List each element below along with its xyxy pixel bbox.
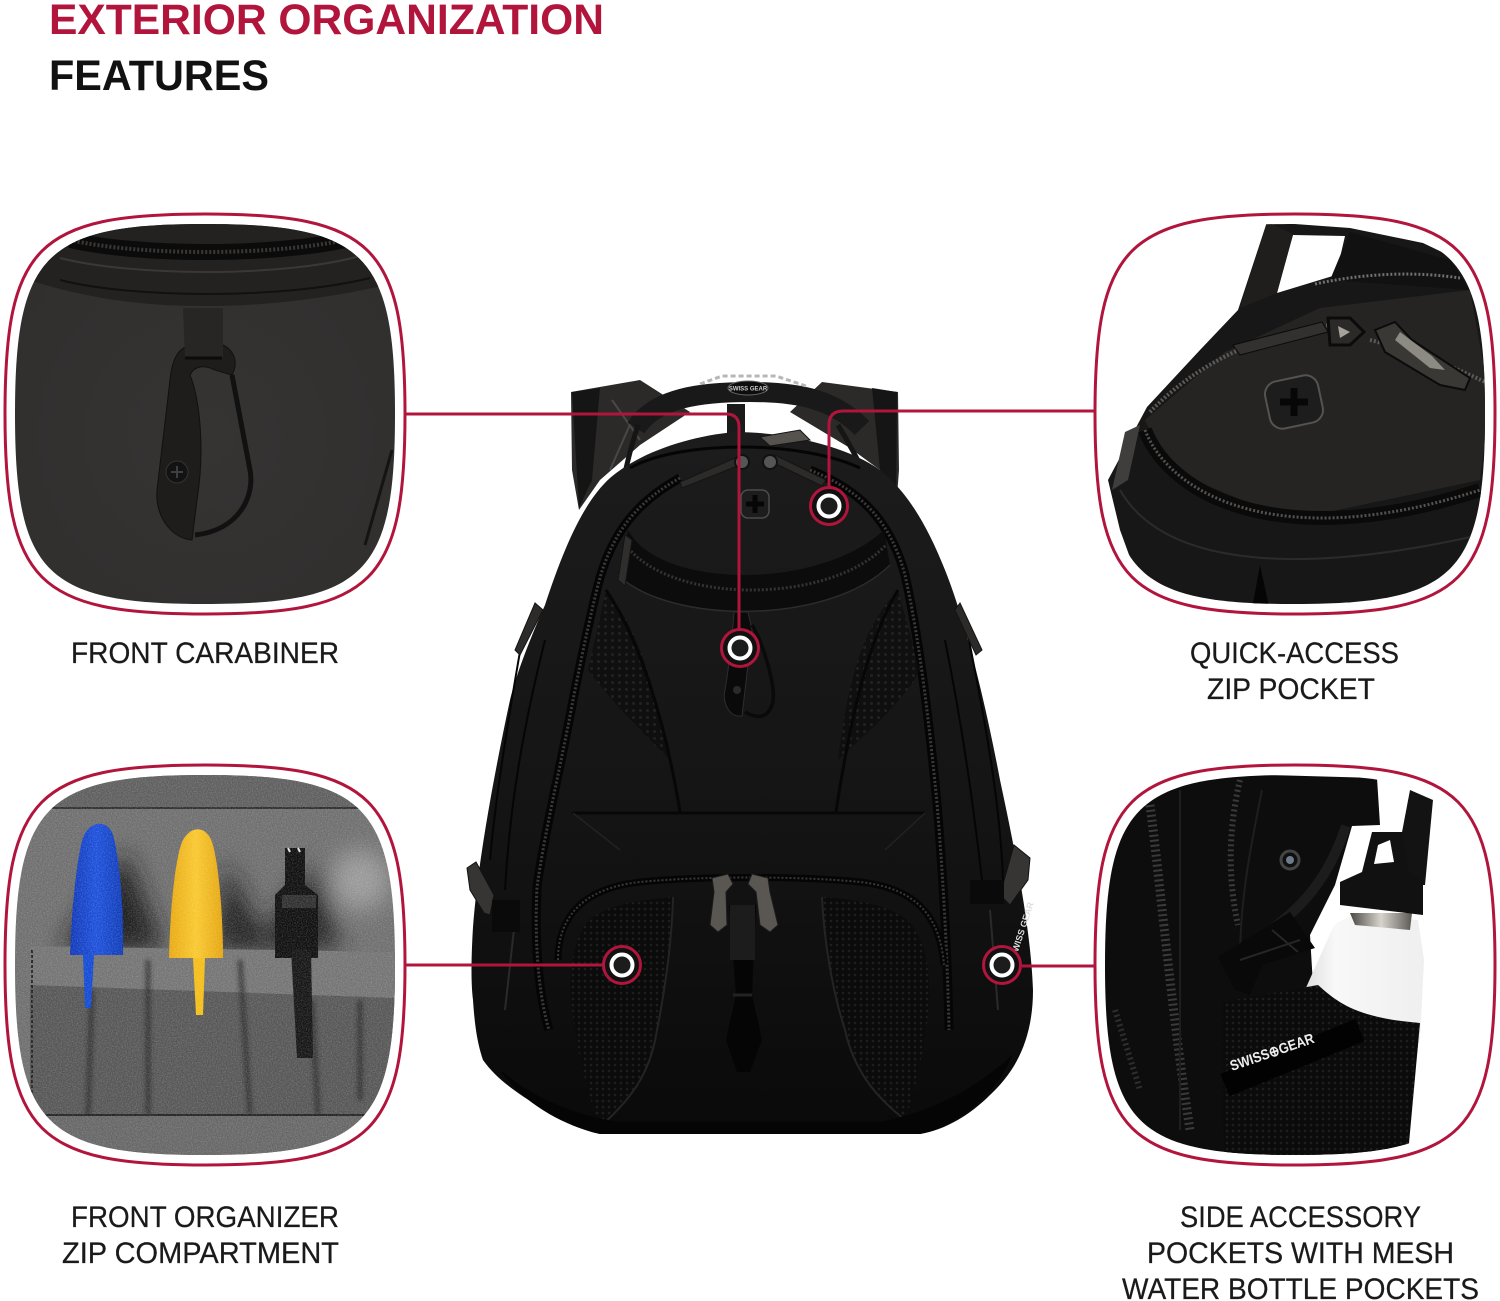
- title: FEATURES: [49, 52, 269, 100]
- shadows behind pens: [60, 850, 390, 950]
- mesh pocket: [1222, 985, 1420, 1165]
- panel: front organizer: [0, 760, 410, 1170]
- zipper lines: [1315, 274, 1460, 284]
- panel: front carabiner: [0, 210, 410, 620]
- backpack shoulder straps: [571, 380, 899, 510]
- bag shape: [1090, 770, 1420, 1165]
- marker: organizer compartment: [604, 946, 640, 984]
- backpack body: [472, 432, 1033, 1134]
- backpack seams: [558, 590, 944, 1127]
- shoulder strap: [1402, 790, 1433, 885]
- lower pocket: [1253, 566, 1268, 604]
- label: front carabiner: FRONT CARABINER: [71, 637, 339, 670]
- backpack front pocket zip: [618, 530, 890, 611]
- connector line: front carabiner: [405, 414, 739, 629]
- label: front organizer zip compartment: [62, 1201, 339, 1270]
- logo badge: [1263, 373, 1325, 431]
- backpack mesh panels: [571, 590, 929, 1127]
- yellow pen: [169, 829, 223, 1015]
- zipper pulls: [1233, 322, 1328, 355]
- marker: front carabiner: [722, 630, 758, 666]
- backpack zipper pulls: [515, 430, 982, 655]
- zippers: [1150, 805, 1190, 1130]
- label: side accessory pockets: POCKETS WITH MESH: [1147, 1237, 1454, 1270]
- black pen: [275, 848, 318, 1058]
- label: front organizer zip compartment: ZIP COMPARTMENT: [62, 1237, 339, 1270]
- backpack side buckles: [467, 845, 1036, 959]
- brand label: SWISS⊕GEAR: [1228, 1031, 1317, 1075]
- backpack handle: [622, 376, 868, 490]
- label: side accessory pockets: SIDE ACCESSORY: [1180, 1201, 1421, 1234]
- backpack product image: [467, 376, 1036, 1134]
- marker: quick-access pocket: [810, 488, 848, 524]
- blue pen: [70, 824, 123, 1008]
- zipper band: [34, 224, 378, 306]
- marker: side pockets: [984, 946, 1020, 984]
- connector line: quick-access pocket: [829, 411, 1094, 487]
- panel: side accessory pockets: [1090, 765, 1495, 1165]
- backpack top compartment zips: [490, 447, 1003, 1030]
- label: front organizer zip compartment: FRONT ORGANIZER: [71, 1201, 339, 1234]
- bottle: [1305, 832, 1424, 1040]
- buckle: [1238, 912, 1315, 961]
- connector line: organizer compartment: [405, 964, 603, 966]
- title: [49, 0, 604, 100]
- fabric fold: [365, 450, 392, 545]
- backpack badge: [741, 490, 769, 518]
- carabiner: [157, 308, 251, 540]
- backpack carabiner: [724, 612, 773, 716]
- pocket: [30, 946, 395, 1155]
- label: quick-access zip pocket: QUICK-ACCESS: [1190, 637, 1399, 670]
- bag shape: [1108, 224, 1485, 604]
- backpack side buckles: SWISS GEAR: [1008, 900, 1036, 959]
- top band: [52, 775, 358, 808]
- backpack handle: SWISS GEAR: [729, 386, 768, 392]
- fabric texture: [15, 775, 395, 1155]
- connector line: side pockets: [1022, 964, 1094, 968]
- label: quick-access zip pocket: ZIP POCKET: [1207, 673, 1375, 706]
- backpack lower zipper pulls and strap: [710, 874, 778, 1072]
- backpack base shading: [500, 1055, 1012, 1134]
- eyelet: [1281, 851, 1299, 869]
- label: quick-access zip pocket: [1190, 637, 1399, 706]
- label: side accessory pockets: [1122, 1201, 1479, 1301]
- panel: quick-access zip pocket: [1095, 214, 1500, 640]
